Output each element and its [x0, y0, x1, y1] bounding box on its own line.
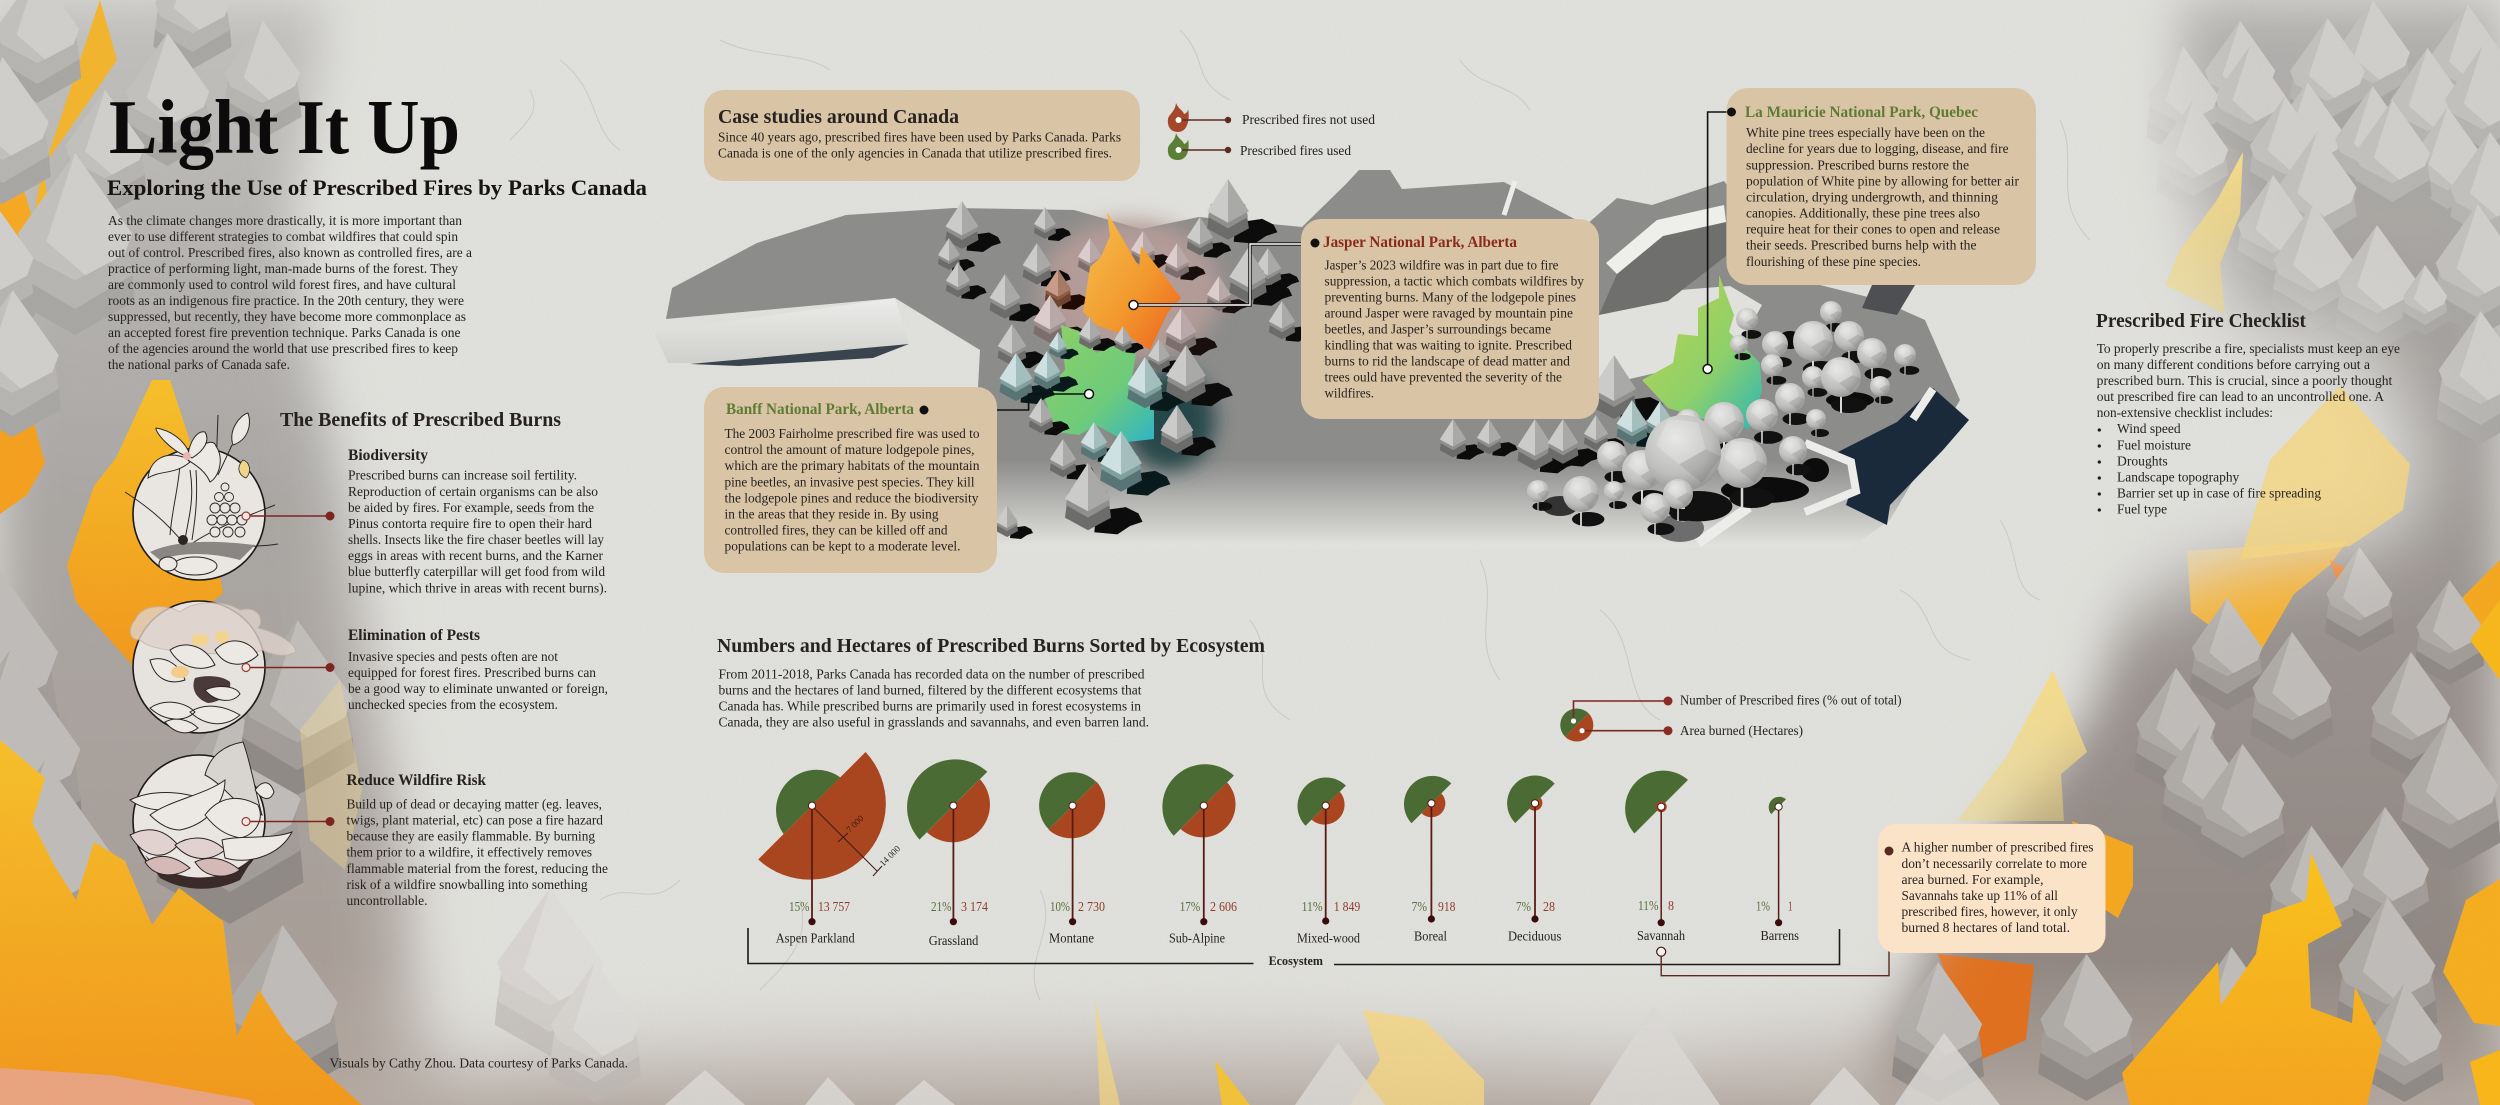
- hudson coast walls: [1805, 443, 1856, 512]
- legend: fire icons: [1168, 103, 1375, 160]
- north coast wall: [1606, 205, 1726, 274]
- callout: note on savannahs: area burned. For example,: [1902, 872, 2044, 887]
- paper notch in land: [1590, 286, 1762, 388]
- labrador wall: [1698, 507, 1749, 543]
- chart: Grassland: 3 174: [961, 900, 988, 915]
- chart intro text: [718, 666, 1149, 730]
- chart: Montane: 10%: [1050, 900, 1070, 915]
- panel: prescribed fire checklist: out prescribed fire can lead to an uncontrolled one. A: [2097, 389, 2384, 404]
- intro text: practice of performing light, man-made burns of the forest. They: [108, 261, 458, 276]
- chart: Boreal: Boreal: [1414, 929, 1447, 944]
- panel: Banff National Park: control the amount of mature lodgepole pines,: [724, 442, 974, 457]
- panel: La Mauricie National Park: population of White pine by allowing for better air: [1746, 174, 2019, 188]
- map of Canada: [654, 170, 1969, 552]
- chart: Grassland: [907, 759, 990, 948]
- heading: benefits: The Benefits of Prescribed Burns: [280, 410, 561, 431]
- panel: La Mauricie National Park: La Mauricie National Park, Quebec: [1745, 104, 1978, 121]
- intro text: an accepted forest fire prevention technique. Parks Canada is one: [108, 325, 461, 340]
- forest ground left: [0, 0, 460, 1105]
- chart: Boreal: [1404, 776, 1456, 944]
- ecosystem axis bracket: Ecosystem: [1269, 953, 1323, 968]
- text block: biodiversity: [348, 447, 607, 596]
- text block: reduce wildfire risk: Build up of dead or decaying matter (eg. leaves,: [346, 796, 602, 812]
- panel: La Mauricie National Park: canopies. Additionally, these pine trees also: [1746, 206, 1980, 220]
- text block: reduce wildfire risk: risk of a wildfire snowballing into something: [346, 877, 588, 892]
- callout: note on savannahs: burned 8 hectares of land total.: [1902, 920, 2070, 935]
- chart: Aspen Parkland: Aspen Parkland: [776, 931, 855, 946]
- chart: Deciduous: Deciduous: [1508, 929, 1561, 944]
- east dark water: [1836, 388, 1969, 525]
- intro text: [108, 213, 472, 372]
- panel: Jasper National Park: beetles, and Jasper’s surroundings became: [1324, 322, 1551, 336]
- forest ground bottom: [0, 960, 2500, 1105]
- panel: Jasper National Park: trees ould have prevented the severity of the: [1324, 370, 1562, 384]
- north shadow land: [1599, 222, 1726, 315]
- chart: Aspen Parkland: 7 000: [844, 813, 866, 835]
- panel: prescribed fire checklist: Droughts: [2117, 454, 2168, 468]
- chart intro text: burns and the hectares of land burned, filtered by the different ecosystems that: [718, 682, 1142, 698]
- trees in front of the fires: [996, 308, 1666, 539]
- panel: La Mauricie National Park: [1726, 88, 2036, 285]
- background trees left: [0, 0, 302, 437]
- chart: Aspen Parkland: 15%: [789, 900, 810, 915]
- legend labels: Prescribed fires not used: [1242, 112, 1375, 127]
- background trees right top: [2146, 0, 2500, 444]
- panel: Jasper National Park: preventing burns. Many of the lodgepole pines: [1324, 290, 1576, 304]
- panel: Banff National Park: which are the primary habitats of the mountain: [724, 458, 980, 473]
- chart: Deciduous: 28: [1543, 900, 1555, 915]
- text block: reduce wildfire risk: [346, 772, 608, 908]
- panel: prescribed fire checklist: Fuel moisture: [2117, 438, 2191, 452]
- panel: prescribed fire checklist: Landscape topography: [2117, 470, 2240, 484]
- panel: prescribed fire checklist: To properly prescribe a fire, specialists must keep an eye: [2097, 341, 2400, 356]
- panel: La Mauricie National Park: their seeds. Prescribed burns help with the: [1746, 238, 1976, 252]
- panel: Banff National Park: pine beetles, an invasive pest species. They kill: [724, 474, 975, 490]
- text block: biodiversity: eggs in areas with recent burns, and the Karner: [348, 548, 604, 563]
- chart: Mixed-wood: Mixed-wood: [1297, 931, 1360, 946]
- legend labels: [1240, 112, 1375, 158]
- forest ground right: [1860, 0, 2500, 1105]
- text block: biodiversity: Pinus contorta require fire to open their hard: [348, 516, 592, 531]
- land: [666, 170, 1960, 552]
- callout: note on savannahs: don’t necessarily correlate to more: [1902, 856, 2087, 871]
- callout: note on savannahs: prescribed fires, however, it only: [1902, 904, 2078, 919]
- panel: Banff National Park: [704, 387, 997, 573]
- panel: Banff National Park: the lodgepole pines and reduce the biodiversity: [724, 490, 979, 506]
- text block: elimination of pests: unchecked species from the ecosystem.: [348, 697, 558, 712]
- panel: Jasper National Park: wildfires.: [1324, 386, 1374, 400]
- panel: Banff National Park: in the areas that they reside in. By using: [724, 506, 939, 522]
- chart: Barrens: [1756, 797, 1799, 943]
- chart: Mixed-wood: 11%: [1302, 900, 1323, 915]
- panel: Banff National Park: populations can be kept to a moderate level.: [724, 538, 960, 554]
- intro text: As the climate changes more drastically, it is more important than: [108, 213, 462, 228]
- intro text: ever to use different strategies to combat wildfires that could spin: [108, 229, 458, 244]
- intro text: are commonly used to control wild forest fires, and have cultural: [108, 277, 456, 292]
- teal glow: [1125, 370, 1215, 470]
- east coast walls: [1913, 389, 1933, 419]
- icon: flame not used: [1168, 103, 1231, 132]
- callout: note on savannahs: [1657, 824, 2106, 976]
- wall peak: [1504, 181, 1515, 215]
- panel: La Mauricie National Park: circulation, drying undergrowth, and thinning: [1746, 190, 1998, 204]
- panel: prescribed fire checklist: prescribed burn. This is crucial, since a poorly thought: [2097, 373, 2393, 388]
- chart: Montane: 2 730: [1078, 900, 1105, 915]
- panel: La Mauricie National Park: suppression. Prescribed burns restore the: [1746, 158, 1969, 172]
- text block: reduce wildfire risk: because they are easily flammable. By burning: [346, 828, 595, 844]
- panel: Jasper National Park: suppression, a tactic which combats wildfires by: [1324, 274, 1584, 288]
- chart: Sub-Alpine: 2 606: [1210, 900, 1237, 915]
- trees behind the fires: [938, 179, 1313, 368]
- panel: Banff National Park: The 2003 Fairholme prescribed fire was used to: [724, 426, 980, 441]
- panel: prescribed fire checklist: Wind speed: [2117, 421, 2181, 436]
- heading: chart: Numbers and Hectares of Prescribed Burns Sorted by Ecosystem: [717, 635, 1265, 657]
- illustration: smoke and burning plants in circle: [130, 601, 334, 733]
- illustration: dead leaves in circle: [130, 742, 334, 889]
- chart: Savannah: [1625, 771, 1688, 943]
- panel: prescribed fire checklist: Prescribed Fire Checklist: [2096, 311, 2306, 332]
- chart intro text: From 2011-2018, Parks Canada has recorded data on the number of prescribed: [718, 666, 1145, 682]
- intro text: the national parks of Canada safe.: [108, 357, 290, 372]
- west fire: Banff: [1043, 325, 1154, 442]
- text block: reduce wildfire risk: twigs, plant material, etc) can pose a fire hazard: [346, 812, 603, 828]
- panel: prescribed fire checklist: Fuel type: [2117, 502, 2167, 516]
- text block: elimination of pests: [348, 627, 608, 712]
- panel: case studies: Case studies around Canada: [718, 106, 959, 128]
- panel: La Mauricie National Park: decline for years due to logging, disease, and fire: [1746, 141, 2009, 156]
- pale flames and pale trees: [300, 152, 2410, 1105]
- chart: Savannah: 11%: [1638, 899, 1659, 914]
- connector: [242, 817, 334, 826]
- illustration: flowers in circle: [125, 413, 334, 580]
- panel: Jasper National Park: around Jasper were ravaged by mountain pine: [1324, 306, 1573, 320]
- panel: prescribed fire checklist: on many different conditions before carrying out a: [2097, 357, 2370, 372]
- chart: Grassland: 21%: [931, 900, 952, 915]
- panel: prescribed fire checklist: [2096, 311, 2400, 516]
- panel: case studies: [704, 90, 1140, 181]
- west fire: Jasper: [1083, 212, 1181, 350]
- panel: Banff National Park: Banff National Park, Alberta: [726, 401, 914, 418]
- chart: Aspen Parkland: 14 000: [878, 843, 903, 868]
- text block: elimination of pests: be a good way to eliminate unwanted or foreign,: [348, 681, 608, 696]
- panel: case studies: Since 40 years ago, prescribed fires have been used by Parks Canada. Parks: [718, 130, 1121, 144]
- panel: Jasper National Park: [1301, 219, 1599, 419]
- subtitle: Exploring the Use of Prescribed Fires by Parks Canada: [107, 175, 647, 200]
- panel: Banff National Park: controlled fires, they can be killed off and: [724, 522, 948, 538]
- intro text: of the agencies around the world that use prescribed fires to keep: [108, 341, 458, 356]
- chart legend: Number of Prescribed fires (% out of total): [1680, 692, 1902, 708]
- title: Light It Up: [109, 84, 460, 170]
- chart: Sub-Alpine: 17%: [1180, 900, 1200, 915]
- connector: [242, 663, 334, 672]
- east fire: La Mauricie: [1642, 275, 1762, 429]
- icon: flame used: [1168, 133, 1231, 160]
- leader: La Mauricie: [1703, 112, 1731, 374]
- text block: biodiversity: Prescribed burns can increase soil fertility.: [348, 468, 577, 482]
- intro text: roots as an indigenous fire practice. In the 20th century, they were: [108, 293, 464, 308]
- panel: Jasper National Park: Jasper’s 2023 wildfire was in part due to fire: [1324, 258, 1559, 272]
- chart: Boreal: 918: [1438, 900, 1456, 915]
- chart legend: Area burned (Hectares): [1680, 723, 1803, 738]
- chart: Boreal: 7%: [1412, 900, 1427, 915]
- chart: Sub-Alpine: [1162, 764, 1237, 946]
- chart: Aspen Parkland: [758, 752, 903, 946]
- panel: Jasper National Park: kindling that was waiting to ignite. Prescribed: [1324, 338, 1572, 352]
- text block: reduce wildfire risk: Reduce Wildfire Risk: [346, 772, 486, 789]
- chart: Barrens: 1%: [1756, 900, 1770, 915]
- panel: Jasper National Park: burns to rid the landscape of dead matter and: [1324, 354, 1570, 368]
- chart intro text: Canada, they are also useful in grasslands and savannahs, and even barren land.: [718, 714, 1149, 730]
- chart legend: [1560, 692, 1902, 742]
- chart: Savannah: 8: [1668, 899, 1674, 914]
- ecosystem axis bracket: [748, 928, 1840, 968]
- chart: Deciduous: [1507, 775, 1561, 944]
- panel: case studies: Canada is one of the only agencies in Canada that utilize prescribed fires.: [718, 146, 1112, 160]
- text block: biodiversity: lupine, which thrive in areas with recent burns).: [348, 580, 607, 596]
- text block: biodiversity: Biodiversity: [348, 447, 428, 464]
- legend labels: Prescribed fires used: [1240, 143, 1351, 158]
- text block: elimination of pests: Elimination of Pests: [348, 627, 480, 644]
- credit: Visuals by Cathy Zhou. Data courtesy of Parks Canada.: [330, 1056, 628, 1070]
- panel: La Mauricie National Park: require heat for their cones to open and release: [1746, 222, 2000, 236]
- dark patch: [1862, 285, 1915, 315]
- black shadow patches: [1542, 331, 1874, 542]
- chart: Aspen Parkland: 13 757: [818, 900, 850, 915]
- panel: Jasper National Park: Jasper National Park, Alberta: [1323, 234, 1517, 251]
- panel: prescribed fire checklist: non-extensive checklist includes:: [2097, 405, 2273, 420]
- connector: [242, 512, 334, 520]
- chart: Grassland: Grassland: [929, 933, 979, 948]
- text block: elimination of pests: equipped for forest fires. Prescribed burns can: [348, 665, 596, 680]
- text block: biodiversity: blue butterfly caterpillar will get food from wild: [348, 564, 605, 579]
- chart: Deciduous: 7%: [1516, 900, 1531, 915]
- chart: Mixed-wood: 1 849: [1334, 900, 1360, 915]
- chart: Mixed-wood: [1297, 778, 1360, 946]
- text block: reduce wildfire risk: uncontrollable.: [346, 893, 428, 908]
- chart: Sub-Alpine: Sub-Alpine: [1169, 931, 1225, 946]
- panel: La Mauricie National Park: flourishing of these pine species.: [1746, 254, 1921, 269]
- text block: reduce wildfire risk: flammable material from the forest, reducing the: [346, 861, 608, 876]
- text block: reduce wildfire risk: them prior to a wildfire, it effectively removes: [346, 844, 592, 860]
- intro text: suppressed, but recently, they have become more commonplace as: [108, 309, 466, 324]
- background trees left lower: [0, 528, 355, 1100]
- callout: note on savannahs: Savannahs take up 11% of all: [1902, 888, 2058, 903]
- leader: Jasper: [1129, 244, 1315, 310]
- pink glow around west fire: [1040, 220, 1220, 360]
- text block: elimination of pests: Invasive species and pests often are not: [348, 649, 558, 664]
- chart: Barrens: 1: [1788, 900, 1792, 915]
- text block: biodiversity: shells. Insects like the fire chaser beetles will lay: [348, 532, 604, 547]
- west wall shadow: [690, 344, 909, 366]
- text block: biodiversity: be aided by fires. For example, seeds from the: [348, 500, 594, 515]
- text block: biodiversity: Reproduction of certain organisms can be also: [348, 484, 598, 499]
- chart intro text: Canada has. While prescribed burns are primarily used in forest ecosystems in: [718, 698, 1141, 714]
- panel: prescribed fire checklist: Barrier set up in case of fire spreading: [2117, 486, 2321, 500]
- conifers over east fire: [1584, 400, 1691, 452]
- deciduous trees: [1527, 301, 1919, 535]
- chart: Montane: Montane: [1049, 931, 1094, 946]
- chart: Barrens: Barrens: [1760, 928, 1799, 943]
- panel: La Mauricie National Park: White pine trees especially have been on the: [1746, 125, 1985, 140]
- leader: Banff: [924, 390, 1094, 410]
- scale ticks: [812, 806, 882, 876]
- intro text: out of control. Prescribed fires, also known as controlled fires, are a: [108, 245, 472, 260]
- flames in front of trees: [0, 600, 2500, 1105]
- west paper wall: [654, 298, 909, 363]
- callout: note on savannahs: A higher number of prescribed fires: [1902, 840, 2094, 854]
- background trees right lower: [1892, 547, 2500, 1102]
- chart: Savannah: Savannah: [1637, 928, 1685, 943]
- chart: Montane: [1039, 772, 1105, 946]
